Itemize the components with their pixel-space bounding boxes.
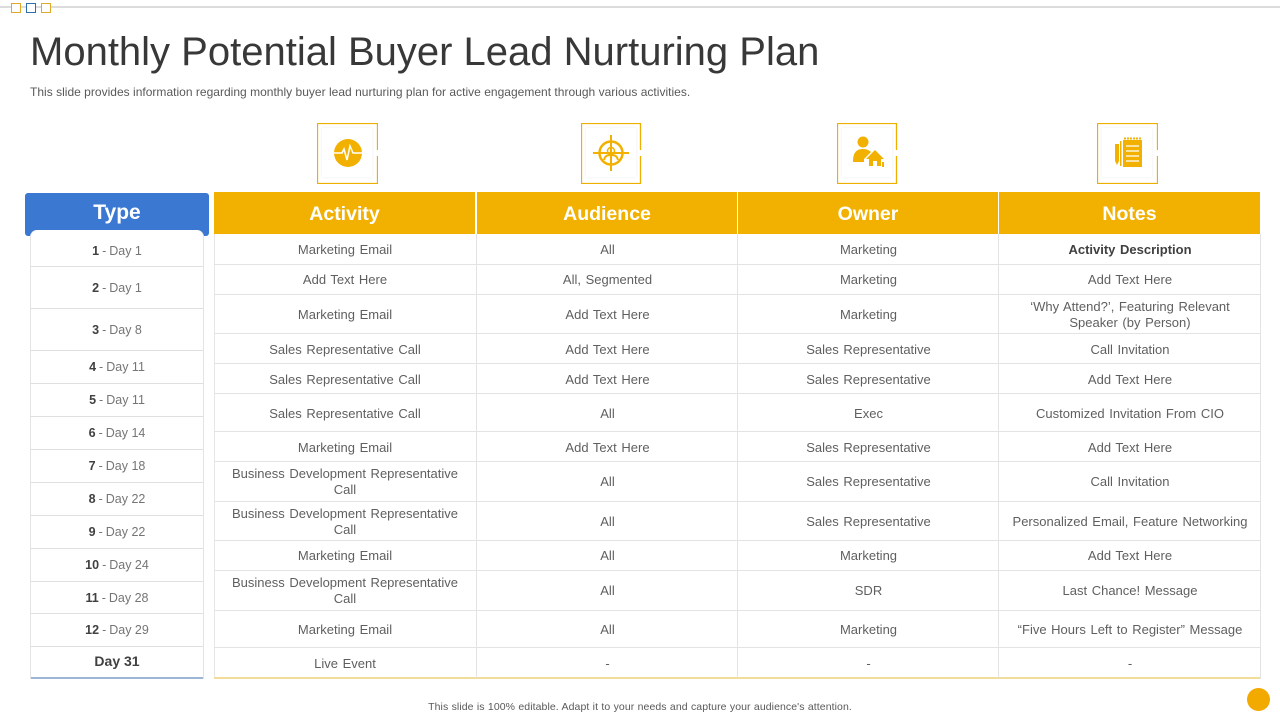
type row 8: - xyxy=(99,492,103,506)
column dividers xyxy=(476,234,999,678)
type row 9: Day 22 xyxy=(106,525,145,539)
row 10 xyxy=(214,541,1260,571)
row 13: - xyxy=(1128,656,1132,670)
decorative squares xyxy=(11,3,51,13)
row 2: Add Text Here xyxy=(1088,272,1172,286)
type row 10: Day 24 xyxy=(109,558,149,572)
row 10: Marketing xyxy=(840,548,897,562)
type row 3 xyxy=(31,309,203,351)
type row 6 xyxy=(31,417,203,450)
type row 2: Day 1 xyxy=(109,281,142,295)
top rule xyxy=(0,6,1280,8)
type row 8 xyxy=(31,483,203,516)
row 3 xyxy=(214,295,1260,334)
type row 6: - xyxy=(99,426,103,440)
row 8: Sales Representative xyxy=(806,474,931,488)
type row 5: - xyxy=(99,393,103,407)
row 11: Business Development Representative xyxy=(232,574,458,590)
type row 1: 1 xyxy=(92,244,99,258)
type row 5 xyxy=(31,384,203,417)
type row 2: 2 xyxy=(92,281,99,295)
row 9: All xyxy=(600,514,615,529)
row 4: Sales Representative Call xyxy=(269,342,421,356)
row 12: Marketing Email xyxy=(298,622,392,637)
type row 10: - xyxy=(102,558,106,572)
row 8: Call Invitation xyxy=(1090,474,1170,488)
row 13: Live Event xyxy=(314,656,376,670)
type row 2 xyxy=(31,267,203,309)
type row 10 xyxy=(31,549,203,582)
title: Monthly Potential Buyer Lead Nurturing Plan xyxy=(30,30,819,74)
row 3: Add Text Here xyxy=(565,307,650,322)
row 11 xyxy=(214,571,1260,611)
type row 6: Day 14 xyxy=(106,426,145,440)
header: audience: Audience xyxy=(563,203,651,225)
header: owner: Owner xyxy=(838,203,898,225)
row 7: Marketing Email xyxy=(298,440,392,454)
row 8: Call xyxy=(334,482,356,496)
type header xyxy=(25,193,209,236)
icon: notes notepad xyxy=(1097,123,1158,184)
row 2: All, Segmented xyxy=(563,272,652,286)
type row 11: Day 28 xyxy=(109,590,148,604)
row 6: Customized Invitation From CIO xyxy=(1036,406,1224,420)
header: activity xyxy=(214,192,475,234)
header: audience xyxy=(477,192,737,234)
type row 12: 12 xyxy=(85,623,99,637)
row 1: All xyxy=(600,242,615,257)
type row 6: 6 xyxy=(89,426,96,440)
icon: activity pulse xyxy=(317,123,378,184)
row 1: Marketing xyxy=(840,242,897,257)
type row 12: Day 29 xyxy=(109,623,149,637)
row 6: Sales Representative Call xyxy=(269,406,421,420)
row 3: Marketing xyxy=(840,307,897,322)
row 4: Add Text Here xyxy=(565,342,650,356)
type row 12: - xyxy=(102,623,106,637)
type row 9: 9 xyxy=(89,525,96,539)
row 9 xyxy=(214,502,1260,541)
type row 11 xyxy=(31,582,203,614)
row 1 xyxy=(214,234,1260,265)
type row 8: Day 22 xyxy=(106,492,145,506)
type row 9 xyxy=(31,516,203,549)
type row 12 xyxy=(31,614,203,647)
row 6: Exec xyxy=(854,406,883,420)
type row 3: 3 xyxy=(92,323,99,337)
row 13: - xyxy=(605,656,610,670)
type row 1 xyxy=(31,232,203,267)
row 9: Personalized Email, Feature Networking xyxy=(1013,514,1247,529)
type row day 31 xyxy=(31,647,203,679)
header: notes: Notes xyxy=(1102,203,1157,225)
type row 7: 7 xyxy=(89,459,96,473)
row 4: Call Invitation xyxy=(1090,342,1170,356)
table frame xyxy=(214,234,1261,679)
row 2 xyxy=(214,265,1260,295)
row 13 xyxy=(214,648,1260,679)
row 8: All xyxy=(600,474,615,488)
row 6: All xyxy=(600,406,615,420)
type row 10: 10 xyxy=(85,558,99,572)
type row 7: - xyxy=(99,459,103,473)
header: owner xyxy=(738,192,998,234)
type row day 31: Day 31 xyxy=(94,652,140,668)
type row 8: 8 xyxy=(89,492,96,506)
type row 11: - xyxy=(102,590,106,604)
type row 7: Day 18 xyxy=(106,459,145,473)
row 5: Add Text Here xyxy=(565,372,650,386)
row 8 xyxy=(214,462,1260,502)
row 5: Sales Representative Call xyxy=(269,372,421,386)
row 12: “Five Hours Left to Register” Message xyxy=(1018,622,1242,637)
row 7 xyxy=(214,432,1260,462)
row 9: Business Development Representative xyxy=(232,506,458,521)
type row 4: 4 xyxy=(89,360,96,374)
row 3: ‘Why Attend?’, Featuring Relevant xyxy=(1030,299,1230,314)
row 5 xyxy=(214,364,1260,394)
footer note: This slide is 100% editable. Adapt it to your needs and capture your audience's attention. xyxy=(428,701,852,713)
type row 1: - xyxy=(102,244,106,258)
row 3: Speaker (by Person) xyxy=(1069,315,1191,330)
row 11: SDR xyxy=(855,582,882,598)
row 9: Sales Representative xyxy=(806,514,931,529)
row 11: Call xyxy=(334,590,356,606)
row 8: Business Development Representative xyxy=(232,466,458,480)
subtitle: This slide provides information regarding monthly buyer lead nurturing plan for active engagement through various activities. xyxy=(30,85,690,99)
row 4: Sales Representative xyxy=(806,342,931,356)
type row 3: - xyxy=(102,323,106,337)
type row 3: Day 8 xyxy=(109,323,142,337)
row 10: Marketing Email xyxy=(298,548,392,562)
row 2: Add Text Here xyxy=(303,272,387,286)
row 9: Call xyxy=(334,522,356,537)
row 6 xyxy=(214,394,1260,432)
row 12: All xyxy=(600,622,615,637)
row 3: Marketing Email xyxy=(298,307,392,322)
row 12: Marketing xyxy=(840,622,897,637)
row 1: Activity Description xyxy=(1068,242,1192,257)
row 4 xyxy=(214,334,1260,364)
row 2: Marketing xyxy=(840,272,897,286)
icon: owner person with house xyxy=(837,123,898,184)
type row 11: 11 xyxy=(86,590,99,604)
row 11: All xyxy=(600,582,615,598)
row 7: Sales Representative xyxy=(806,440,931,454)
type list card xyxy=(30,230,204,679)
row 11: Last Chance! Message xyxy=(1063,582,1197,598)
row 7: Add Text Here xyxy=(1088,440,1172,454)
type row 5: Day 11 xyxy=(106,393,145,407)
row 10: Add Text Here xyxy=(1088,548,1172,562)
row 7: Add Text Here xyxy=(565,440,650,454)
type row 5: 5 xyxy=(89,393,96,407)
header: notes xyxy=(999,192,1260,234)
type row 4 xyxy=(31,351,203,384)
type row 7 xyxy=(31,450,203,483)
type row 1: Day 1 xyxy=(109,244,142,258)
type row 4: - xyxy=(99,360,103,374)
header: activity: Activity xyxy=(309,203,380,225)
row 13: - xyxy=(866,656,871,670)
row 1: Marketing Email xyxy=(298,242,392,257)
row 5: Sales Representative xyxy=(806,372,931,386)
row 5: Add Text Here xyxy=(1088,372,1172,386)
type row 9: - xyxy=(99,525,103,539)
type row 4: Day 11 xyxy=(106,360,145,374)
page dot xyxy=(1247,688,1270,711)
icon: audience target xyxy=(581,123,642,184)
type header: Type xyxy=(93,201,141,224)
row 12 xyxy=(214,611,1260,648)
type row 2: - xyxy=(102,281,106,295)
row 10: All xyxy=(600,548,615,562)
